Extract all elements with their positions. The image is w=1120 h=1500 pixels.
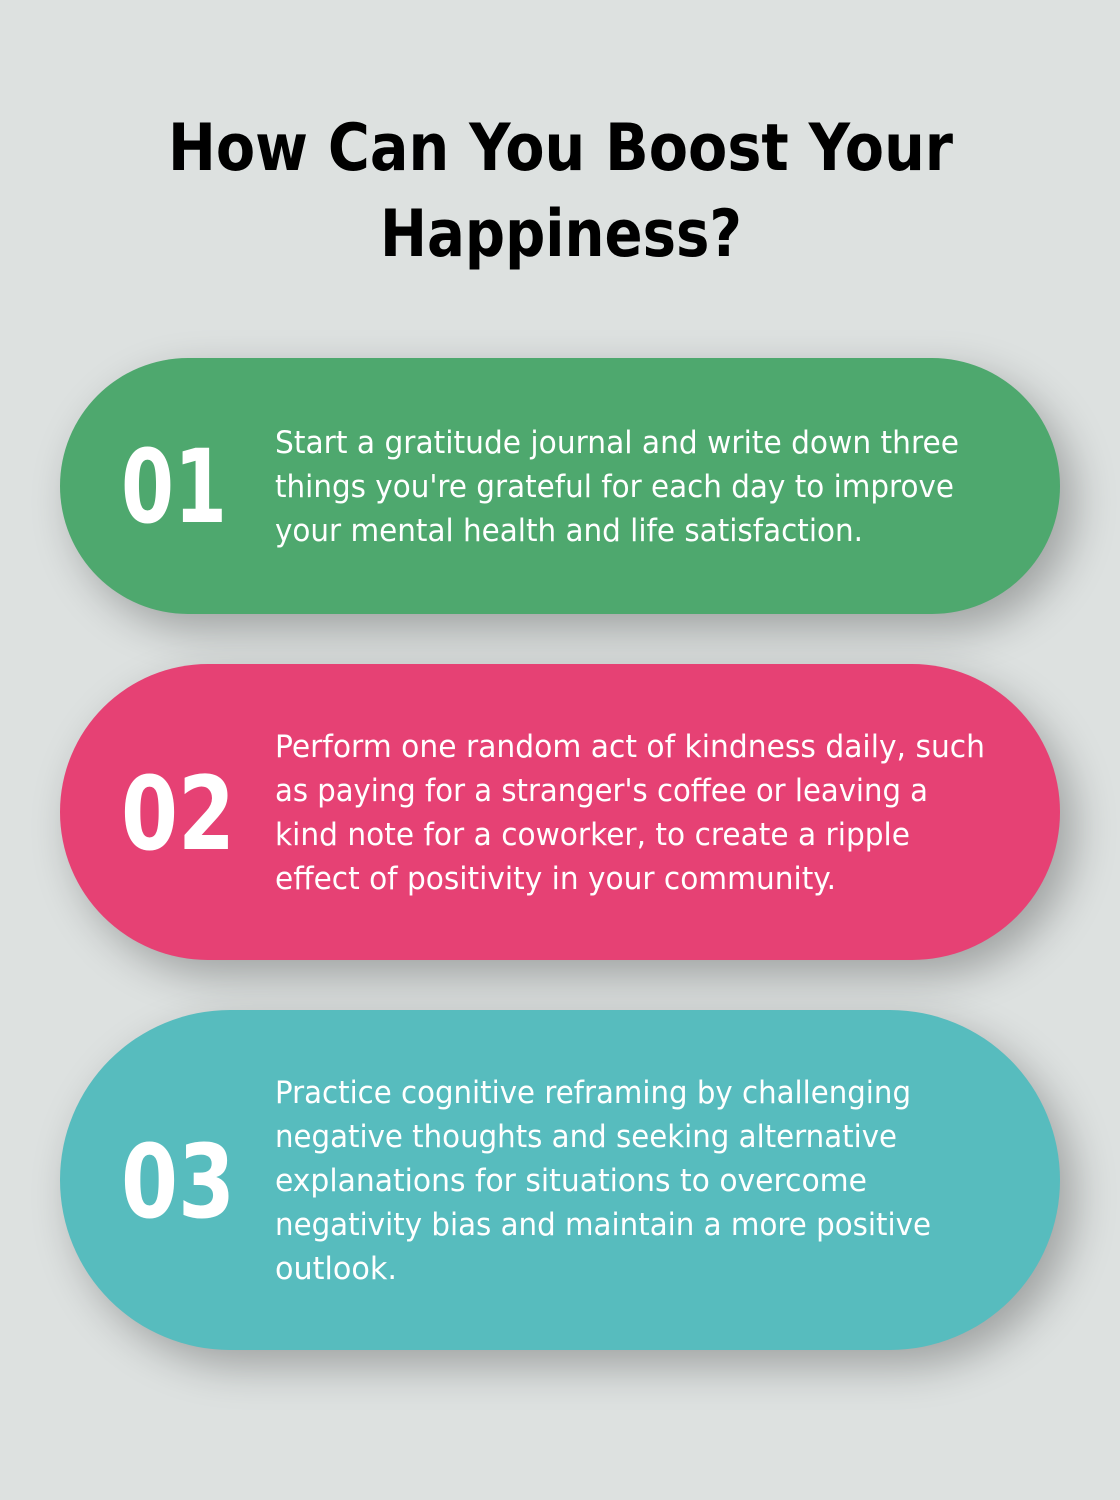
text block: step 2: as paying for a stranger's coffee or leaving a	[275, 773, 928, 809]
text block: step 1: Start a gratitude journal and write down three	[275, 425, 959, 461]
text block: step 3	[275, 1075, 931, 1287]
text block: step 1	[275, 425, 959, 549]
text block: step 1: things you're grateful for each day to improve	[275, 469, 954, 505]
text block: step 2	[275, 729, 985, 897]
panel: step 2 pill	[60, 664, 1060, 960]
number 02: 02	[121, 755, 235, 874]
text block: step 3: Practice cognitive reframing by challenging	[275, 1075, 911, 1111]
title: Happiness?	[380, 197, 742, 272]
text block: step 2: kind note for a coworker, to create a ripple	[275, 817, 910, 853]
text block: step 3: outlook.	[275, 1251, 397, 1287]
text block: step 3: explanations for situations to overcome	[275, 1163, 867, 1199]
text block: step 1: your mental health and life satisfaction.	[275, 513, 863, 549]
panel: step 3 pill	[60, 1010, 1060, 1350]
text block: step 2: Perform one random act of kindness daily, such	[275, 729, 985, 765]
text block: step 3: negative thoughts and seeking alternative	[275, 1119, 897, 1155]
text block: step 2: effect of positivity in your community.	[275, 861, 836, 897]
number 03: 03	[121, 1123, 235, 1242]
text block: step 3: negativity bias and maintain a more positive	[275, 1207, 931, 1243]
title	[168, 111, 953, 272]
panel: step 1 pill	[60, 358, 1060, 614]
number 01: 01	[121, 428, 227, 547]
title: How Can You Boost Your	[168, 111, 953, 186]
